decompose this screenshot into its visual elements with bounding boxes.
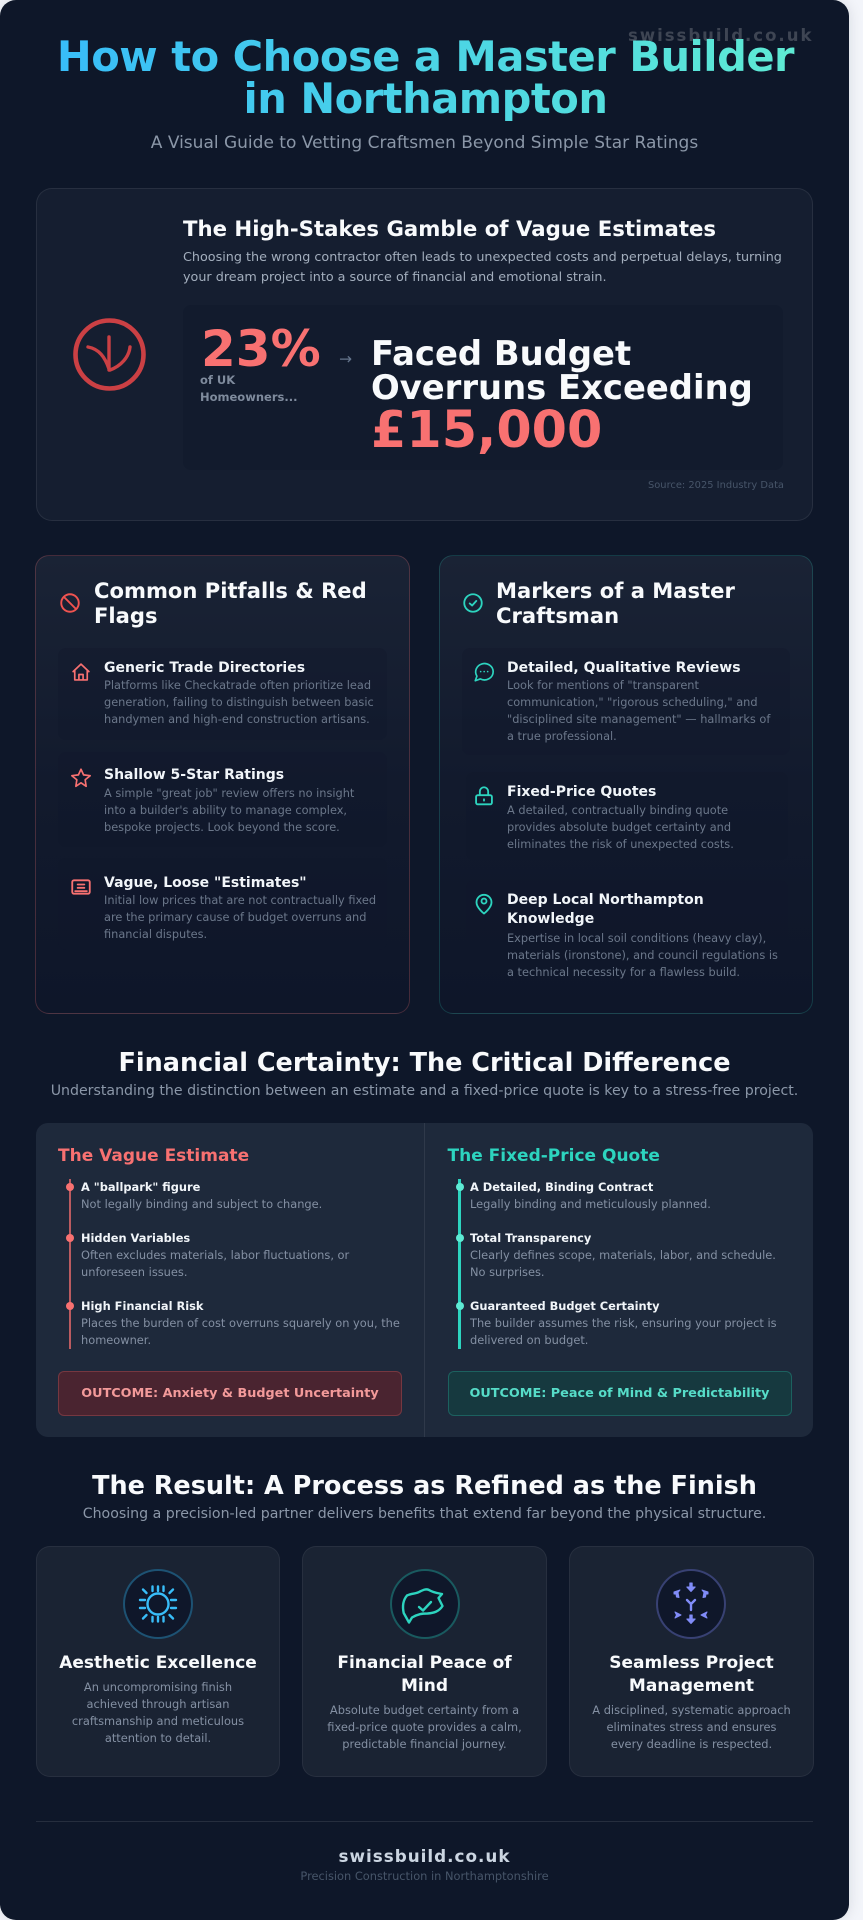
point text: unforeseen issues.: [81, 1265, 187, 1279]
stat: 23 percent: 23%: [201, 320, 321, 378]
footer divider: [36, 1821, 813, 1822]
stat label: of UK: [200, 373, 235, 387]
icon: padlock: [475, 786, 493, 806]
item text: Platforms like Checkatrade often prioritize lead: [104, 678, 371, 692]
card text: attention to detail.: [105, 1731, 211, 1745]
stat label: [200, 373, 297, 404]
arrow: →: [339, 350, 352, 368]
item text: [507, 678, 771, 742]
card text: Absolute budget certainty from a: [330, 1703, 519, 1717]
outcome: anxiety: [58, 1371, 402, 1416]
title: How to Choose a Master Builder: [57, 32, 794, 80]
point text: [470, 1248, 776, 1279]
item text: handymen and high-end construction artisans.: [104, 712, 370, 726]
item title: Knowledge: [507, 911, 594, 927]
point: hidden variables: Hidden Variables: [81, 1230, 190, 1244]
item text: bespoke projects. Look beyond the score.: [104, 820, 340, 834]
timeline: [69, 1179, 71, 1349]
icon: converging arrows: [656, 1569, 726, 1639]
outcome: peace of mind: [448, 1371, 792, 1416]
icon: prohibited: [60, 593, 80, 613]
item title: Fixed-Price Quotes: [507, 784, 656, 800]
item text: provides absolute budget certainty and: [507, 820, 731, 834]
point: transparency: Total Transparency: [470, 1230, 591, 1244]
item text: a technical necessity for a flawless build.: [507, 964, 740, 978]
panel: common pitfalls: [35, 555, 410, 1014]
marker: fixed price: [466, 772, 788, 860]
pitfall: ratings: [58, 752, 387, 847]
column heading: The Vague Estimate: [58, 1146, 249, 1166]
point text: [81, 1316, 400, 1347]
card text: every deadline is respected.: [611, 1737, 772, 1751]
item text: communication," "rigorous scheduling," and: [507, 694, 758, 708]
item text: a true professional.: [507, 728, 617, 742]
item title: Vague, Loose "Estimates": [104, 875, 307, 891]
point text: Legally binding and meticulously planned.: [470, 1197, 711, 1211]
stat statement: [371, 334, 753, 407]
point text: [470, 1316, 777, 1347]
column: fixed-price quote: [448, 1146, 792, 1416]
heading: markers: Markers of a Master: [496, 578, 735, 603]
card title: Mind: [401, 1676, 448, 1696]
panel: comparison: [36, 1123, 813, 1437]
divider between columns: [424, 1123, 425, 1437]
point text: The builder assumes the risk, ensuring your project is: [470, 1316, 777, 1330]
card title: [337, 1652, 512, 1696]
stat label: Homeowners...: [200, 390, 297, 404]
pitfall: estimates: [58, 858, 387, 950]
timeline dots: [66, 1183, 74, 1191]
point text: No surprises.: [470, 1265, 545, 1279]
heading: pitfalls: Common Pitfalls & Red: [94, 578, 367, 603]
text: intro paragraph: your dream project into a source of financial and emotional strain.: [183, 270, 607, 285]
point: ballpark: A "ballpark" figure: [81, 1180, 200, 1194]
item text: [104, 893, 376, 941]
icon: shield check: [390, 1569, 460, 1639]
item text: into a builder's ability to manage complex,: [104, 802, 347, 816]
footer tagline: Precision Construction in Northamptonshire: [300, 1869, 549, 1883]
item text: eliminates the risk of unexpected costs.: [507, 836, 734, 850]
panel: markers of a master craftsman: [439, 555, 813, 1014]
column heading: The Fixed-Price Quote: [448, 1146, 660, 1166]
title: in Northampton: [244, 74, 608, 123]
card text: craftsmanship and meticulous: [72, 1714, 244, 1728]
card: aesthetic excellence: [36, 1546, 280, 1777]
footer brand: swissbuild.co.uk: [338, 1846, 511, 1866]
item text: [104, 786, 354, 834]
card text: A disciplined, systematic approach: [592, 1703, 791, 1717]
text: intro paragraph: Choosing the wrong contractor often leads to unexpected costs and perpetual delays, turning: [183, 250, 782, 265]
marker: local knowledge: [466, 880, 788, 990]
icon: map pin: [476, 894, 492, 914]
icon: house: [72, 663, 90, 681]
point text: Clearly defines scope, materials, labor, and schedule.: [470, 1248, 776, 1262]
item text: are the primary cause of budget overruns and: [104, 910, 366, 924]
point: budget certainty: Guaranteed Budget Certainty: [470, 1298, 660, 1312]
heading: markers: [496, 578, 735, 628]
heading: high-stakes gamble: The High-Stakes Gamble of Vague Estimates: [183, 217, 716, 242]
icon: speech bubble: [474, 662, 494, 682]
icon: star: [71, 768, 91, 788]
item text: [507, 930, 778, 978]
point: financial risk: High Financial Risk: [81, 1298, 204, 1312]
point text: homeowner.: [81, 1333, 151, 1347]
text: intro paragraph: [183, 250, 782, 285]
marker: reviews: [462, 648, 790, 755]
heading: financial certainty: Financial Certainty: The Critical Difference: [118, 1048, 731, 1078]
item text: [507, 802, 734, 850]
card text: [72, 1680, 244, 1745]
card: seamless project management: [569, 1546, 814, 1777]
watermark: swissbuild.co.uk: [628, 26, 813, 45]
item text: financial disputes.: [104, 927, 207, 941]
heading: the result: The Result: A Process as Refined as the Finish: [92, 1471, 757, 1501]
item title: Shallow 5-Star Ratings: [104, 767, 284, 783]
item text: Look for mentions of "transparent: [507, 678, 699, 692]
item text: A simple "great job" review offers no insight: [104, 786, 354, 800]
item text: A detailed, contractually binding quote: [507, 802, 728, 816]
item text: Expertise in local soil conditions (heavy clay),: [507, 930, 766, 944]
item title: Deep Local Northampton: [507, 892, 704, 908]
item text: "disciplined site management" — hallmarks of: [507, 712, 770, 726]
item title: [507, 892, 704, 927]
item title: Generic Trade Directories: [104, 660, 305, 676]
item text: Initial low prices that are not contractually fixed: [104, 893, 376, 907]
heading: pitfalls: [94, 578, 367, 628]
item title: Detailed, Qualitative Reviews: [507, 660, 741, 676]
stat box: [183, 305, 783, 470]
icon: document: [71, 879, 91, 895]
card title: [609, 1652, 774, 1696]
card title: Aesthetic Excellence: [59, 1652, 257, 1672]
card title: Seamless Project: [609, 1652, 774, 1672]
card title: Management: [629, 1676, 754, 1696]
item text: [104, 678, 374, 726]
column: vague estimate: [58, 1146, 402, 1416]
stat statement: Overruns Exceeding: [371, 368, 753, 407]
card text: [327, 1703, 522, 1751]
point text: Places the burden of cost overruns squarely on you, the: [81, 1316, 400, 1330]
point text: Not legally binding and subject to change.: [81, 1197, 322, 1211]
subheading: the result: Choosing a precision-led partner delivers benefits that extend far beyond the physical structure.: [83, 1506, 766, 1522]
card text: An uncompromising finish: [84, 1680, 232, 1694]
item text: generation, failing to distinguish between basic: [104, 694, 374, 708]
heading: pitfalls: Flags: [94, 603, 158, 628]
subtitle: A Visual Guide to Vetting Craftsmen Beyond Simple Star Ratings: [151, 133, 698, 153]
source note: Source: 2025 Industry Data: [648, 480, 784, 490]
pitfall: directories: [58, 648, 387, 740]
icon: budget warning clock: [73, 318, 146, 391]
card: financial peace of mind: [302, 1546, 546, 1777]
point text: Often excludes materials, labor fluctuations, or: [81, 1248, 349, 1262]
card title: Financial Peace of: [337, 1652, 512, 1672]
point text: delivered on budget.: [470, 1333, 588, 1347]
card text: fixed-price quote provides a calm,: [327, 1720, 522, 1734]
stat: 15,000 pounds: £15,000: [371, 400, 602, 459]
title: [37, 36, 814, 121]
card text: [592, 1703, 791, 1751]
icon: check circle: [463, 593, 483, 613]
panel: high-stakes gamble: [36, 188, 813, 521]
outcome: anxiety: OUTCOME: Anxiety & Budget Uncertainty: [81, 1386, 379, 1401]
timeline dots: [456, 1183, 464, 1191]
subheading: financial certainty: Understanding the distinction between an estimate and a fixed-price quote is key to a stress-free project.: [51, 1083, 798, 1099]
point: binding contract: A Detailed, Binding Contract: [470, 1180, 653, 1194]
card text: eliminates stress and ensures: [607, 1720, 776, 1734]
outcome: peace of mind: OUTCOME: Peace of Mind & Predictability: [469, 1386, 770, 1401]
heading: markers: Craftsman: [496, 603, 619, 628]
icon: sun: [123, 1569, 193, 1639]
item text: materials (ironstone), and council regulations is: [507, 948, 778, 962]
card text: achieved through artisan: [86, 1697, 230, 1711]
card text: predictable financial journey.: [342, 1737, 507, 1751]
timeline: [458, 1179, 461, 1349]
point text: [81, 1248, 350, 1279]
stat statement: Faced Budget: [371, 334, 631, 373]
